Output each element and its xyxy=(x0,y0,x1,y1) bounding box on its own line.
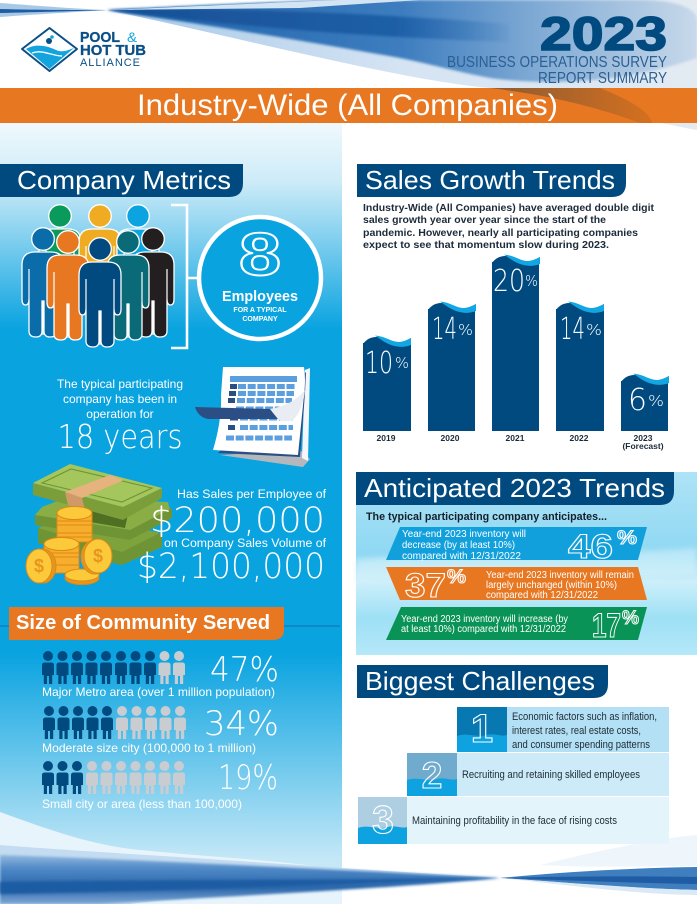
challenge 1: and consumer spending patterns xyxy=(512,739,650,751)
icon: calendar xyxy=(195,367,310,467)
challenge 3: 3 xyxy=(372,799,394,842)
logo: Pool & Hot Tub Alliance: & xyxy=(127,29,138,45)
bar chart: sales growth xyxy=(363,255,669,451)
subheading: The typical participating company anticipates... xyxy=(366,511,607,523)
text: sales growth summary: expect to see that momentum slow during 2023. xyxy=(363,239,609,251)
heading: Company Metrics: Company Metrics xyxy=(17,165,231,195)
bar values: 20 xyxy=(493,264,525,299)
bar axis labels: 2020 xyxy=(441,433,460,443)
callout: 8 employees: FOR A TYPICAL xyxy=(233,307,287,314)
bar values: 6 xyxy=(628,383,647,418)
band: 17% increase: at least 10%) compared with 12/31/2022 xyxy=(401,624,566,635)
pictogram: small city 19%: Small city or area (less than 100,000) xyxy=(42,797,242,811)
text: years in operation: company has been in xyxy=(63,392,177,406)
challenge 2: Recruiting and retaining skilled employees xyxy=(462,769,640,781)
bar axis labels xyxy=(377,433,664,451)
bracket xyxy=(171,205,198,348)
bar values xyxy=(365,264,664,418)
pictogram: moderate city 34%: Moderate size city (100,000 to 1 million) xyxy=(42,741,256,755)
bar values: % xyxy=(525,272,538,290)
heading: Size of Community Served: Size of Community Served xyxy=(16,612,270,634)
band: 37% unchanged: % xyxy=(447,567,466,588)
text: sales figures: $200,000 xyxy=(150,501,325,541)
text: sales figures xyxy=(137,487,327,587)
challenge 1 xyxy=(457,707,669,752)
banner: Industry-Wide xyxy=(0,88,697,123)
bar axis labels: 2019 xyxy=(377,433,396,443)
logo wordmark: POOL xyxy=(80,30,120,46)
pictogram: moderate city 34%: 34% xyxy=(204,704,279,744)
heading: Anticipated 2023 Trends: Anticipated 2023 Trends xyxy=(364,473,665,503)
text: sales figures: $2,100,000 xyxy=(137,547,325,587)
text: sales figures: on Company Sales Volume of xyxy=(164,536,327,550)
challenge 3: Maintaining profitability in the face of rising costs xyxy=(412,815,617,827)
pictogram: major metro 47%: Major Metro area (over 1 million population) xyxy=(42,685,275,699)
challenge 2 xyxy=(407,753,669,796)
callout: 8 employees: Employees xyxy=(222,289,298,305)
bar values: % xyxy=(395,354,409,372)
challenge 1: 1 xyxy=(471,707,493,751)
bar values: % xyxy=(648,392,664,410)
logo: Pool & Hot Tub Alliance xyxy=(22,28,146,71)
heading: Size of Community Served xyxy=(0,607,340,640)
challenge 1: Economic factors such as inflation, xyxy=(512,711,657,723)
challenge 1: interest rates, real estate costs, xyxy=(512,725,641,737)
bar axis labels: (Forecast) xyxy=(622,441,664,451)
pictogram: moderate city 34% xyxy=(42,704,279,755)
heading: Sales Growth Trends: Sales Growth Trends xyxy=(365,165,615,195)
callout: 8 employees: 8 xyxy=(239,221,281,288)
panel: anticipated trends xyxy=(356,472,697,655)
text: years in operation: operation for xyxy=(86,407,154,421)
band: 17% increase xyxy=(386,607,647,645)
logo: Pool & Hot Tub Alliance: ALLIANCE xyxy=(80,57,140,69)
logo: Pool & Hot Tub Alliance: HOT TUB xyxy=(80,43,146,59)
pictogram: major metro 47%: 47% xyxy=(210,650,279,690)
bar values: 14 xyxy=(560,312,585,347)
callout: 8 employees xyxy=(199,217,321,339)
text: sales growth summary: pandemic. However, nearly all participating companies xyxy=(363,227,638,239)
band: 17% increase: Year-end 2023 inventory will increase (by xyxy=(401,614,568,625)
text: sales growth summary: Industry-Wide (All Companies) have averaged double digit xyxy=(363,202,654,214)
bar values: % xyxy=(458,321,473,339)
text: years in operation: The typical participating xyxy=(57,377,183,391)
band: 17% increase: % xyxy=(622,608,639,629)
subtitle xyxy=(447,54,667,87)
band: 46% decrease: compared with 12/31/2022 xyxy=(402,551,521,562)
text: sales growth summary: sales growth year over year since the start of the xyxy=(363,214,606,226)
challenge 3 xyxy=(358,797,669,844)
icon: money and coins: $ xyxy=(93,546,103,566)
band: 46% decrease: 46 xyxy=(568,528,613,566)
background: left blue panel xyxy=(0,123,342,868)
bar values: 14 xyxy=(432,312,457,347)
band: 46% decrease: % xyxy=(617,528,637,549)
text: sales growth summary xyxy=(363,202,654,251)
bar axis labels: 2023 xyxy=(634,433,653,443)
bar axis labels: 2021 xyxy=(506,433,525,443)
text: sales figures: Has Sales per Employee of xyxy=(177,487,327,501)
band: 46% decrease xyxy=(386,527,647,566)
band: 37% unchanged: largely unchanged (within 10%) xyxy=(486,580,617,591)
pictogram: small city 19%: 19% xyxy=(218,758,278,798)
footer swoosh xyxy=(0,812,697,904)
band: 17% increase: 17 xyxy=(592,607,621,645)
challenge 2: 2 xyxy=(422,755,442,796)
header swoosh xyxy=(0,0,697,130)
callout: 8 employees: COMPANY xyxy=(242,316,278,323)
band: 37% unchanged: Year-end 2023 inventory will remain xyxy=(486,570,634,581)
icon: group of eight people xyxy=(22,205,174,347)
band: 46% decrease: Year-end 2023 inventory will xyxy=(402,529,526,540)
banner: Industry-Wide: Industry-Wide (All Companies) xyxy=(137,89,558,122)
icon: money and coins xyxy=(26,464,172,584)
bar values: 10 xyxy=(365,346,393,381)
heading: Biggest Challenges: Biggest Challenges xyxy=(365,666,595,696)
band: 46% decrease: decrease (by at least 10%) xyxy=(402,540,515,551)
text: years in operation: 18 years xyxy=(58,417,182,456)
text: years in operation xyxy=(57,377,183,456)
subtitle: REPORT SUMMARY xyxy=(538,70,667,87)
band: 37% unchanged: compared with 12/31/2022 xyxy=(486,590,598,601)
icon: money and coins: $ xyxy=(34,556,44,576)
band: 37% unchanged: 37 xyxy=(405,567,446,605)
bar values: % xyxy=(586,321,602,339)
bar axis labels: 2022 xyxy=(570,433,589,443)
pictogram: small city 19% xyxy=(42,758,278,811)
band: 37% unchanged xyxy=(386,567,647,605)
title: 2023: 2023 xyxy=(540,7,667,60)
pictogram: major metro 47% xyxy=(42,650,279,699)
